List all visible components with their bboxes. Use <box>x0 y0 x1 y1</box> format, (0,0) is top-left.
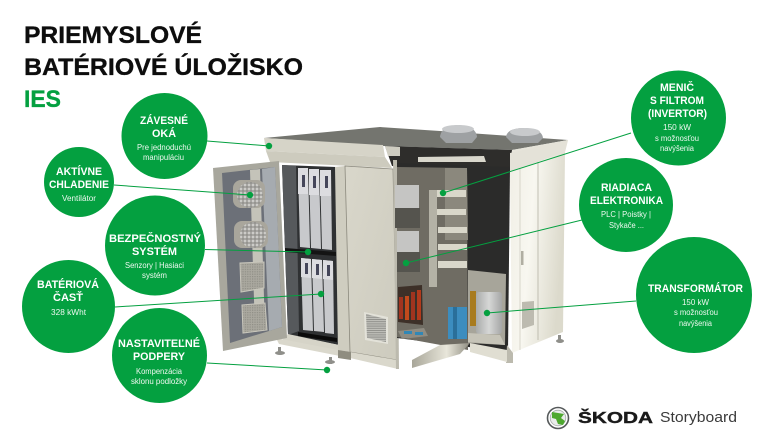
open door with fans <box>213 161 287 351</box>
callout: riadiaca elektronika: ELEKTRONIKA <box>590 195 663 207</box>
reactors <box>395 185 420 272</box>
callout: transformátor <box>636 237 752 353</box>
feet <box>275 335 564 364</box>
fuses <box>398 285 428 339</box>
fans <box>233 180 268 248</box>
floor tray <box>412 343 507 368</box>
battery modules <box>298 168 334 334</box>
transformer <box>468 270 506 345</box>
callout: bezpečnostný systém: SYSTÉM <box>132 245 177 258</box>
callout: menič s filtrom: MENIČ <box>660 81 694 94</box>
callout: bezpečnostný systém: Senzory | Hasiaci <box>125 261 184 270</box>
callout: závesné oká: manipuláciu <box>143 153 184 162</box>
pillar and front panel <box>276 160 399 369</box>
door filters <box>240 262 267 333</box>
callout: menič s filtrom: S FILTROM <box>650 95 704 107</box>
terminal strip <box>429 190 467 287</box>
callout: batériová časť: ČASŤ <box>53 291 83 304</box>
callout: transformátor: TRANSFORMÁTOR <box>648 282 743 295</box>
electronics bay <box>395 163 510 352</box>
title: PRIEMYSLOVÉ <box>24 21 202 49</box>
callout: menič s filtrom: navýšenia <box>660 144 695 153</box>
callout: menič s filtrom <box>631 70 726 166</box>
callout: závesné oká: OKÁ <box>152 127 176 140</box>
callout: transformátor: 150 kW <box>682 298 709 307</box>
callout: menič s filtrom: (INVERTOR) <box>648 108 707 120</box>
icon: škoda emblem <box>548 408 568 428</box>
callout: menič s filtrom: s možnosťou <box>655 134 699 143</box>
louvre vent <box>364 312 388 344</box>
logo: ŠKODA Storyboard: Storyboard <box>660 409 737 426</box>
callout: transformátor: s možnosťou <box>674 308 718 317</box>
illustration: battery storage cabinet <box>213 125 568 369</box>
callout: riadiaca elektronika: Stykače ... <box>609 221 644 230</box>
callout: závesné oká: Pre jednoduchú <box>137 143 191 152</box>
callout: nastaviteľné podpery: PODPERY <box>133 351 186 363</box>
callout: aktívne chladenie: Ventilátor <box>62 194 96 203</box>
callout: bezpečnostný systém: BEZPEČNOSTNÝ <box>109 232 202 245</box>
callout: batériová časť <box>22 260 115 353</box>
callout: nastaviteľné podpery: NASTAVITEĽNÉ <box>118 337 200 350</box>
title: IES <box>24 86 61 113</box>
title <box>24 21 303 113</box>
callout: batériová časť: 328 kWht <box>51 308 87 317</box>
callout: batériová časť: BATÉRIOVÁ <box>37 278 99 291</box>
callout: aktívne chladenie: CHLADENIE <box>49 179 109 191</box>
logo: ŠKODA Storyboard <box>548 408 737 428</box>
leader lines <box>114 133 636 370</box>
roof <box>264 127 568 172</box>
logo: ŠKODA Storyboard: ŠKODA <box>578 408 654 427</box>
title: BATÉRIOVÉ ÚLOŽISKO <box>24 53 303 81</box>
leader dots <box>247 143 490 373</box>
callout: aktívne chladenie: AKTÍVNE <box>56 165 102 178</box>
callout: menič s filtrom: 150 kW <box>663 123 691 132</box>
callout: riadiaca elektronika: PLC | Poistky | <box>601 210 651 219</box>
callout: riadiaca elektronika <box>579 158 673 252</box>
blue terminals <box>448 307 467 339</box>
callout: závesné oká: ZÁVESNÉ <box>140 114 188 127</box>
callout: nastaviteľné podpery: sklonu podložky <box>131 377 187 386</box>
callout: nastaviteľné podpery <box>112 308 207 403</box>
battery bay <box>280 165 345 355</box>
callout: závesné oká <box>122 93 208 179</box>
callout: nastaviteľné podpery: Kompenzácia <box>136 367 183 376</box>
callout: riadiaca elektronika: RIADIACA <box>601 182 652 194</box>
callout: bezpečnostný systém: systém <box>142 271 167 280</box>
callout: transformátor: navýšenia <box>679 319 712 328</box>
right side cabinet <box>506 140 568 363</box>
callout: aktívne chladenie <box>44 147 114 217</box>
callout: bezpečnostný systém <box>105 196 205 296</box>
roof vents <box>440 125 543 143</box>
